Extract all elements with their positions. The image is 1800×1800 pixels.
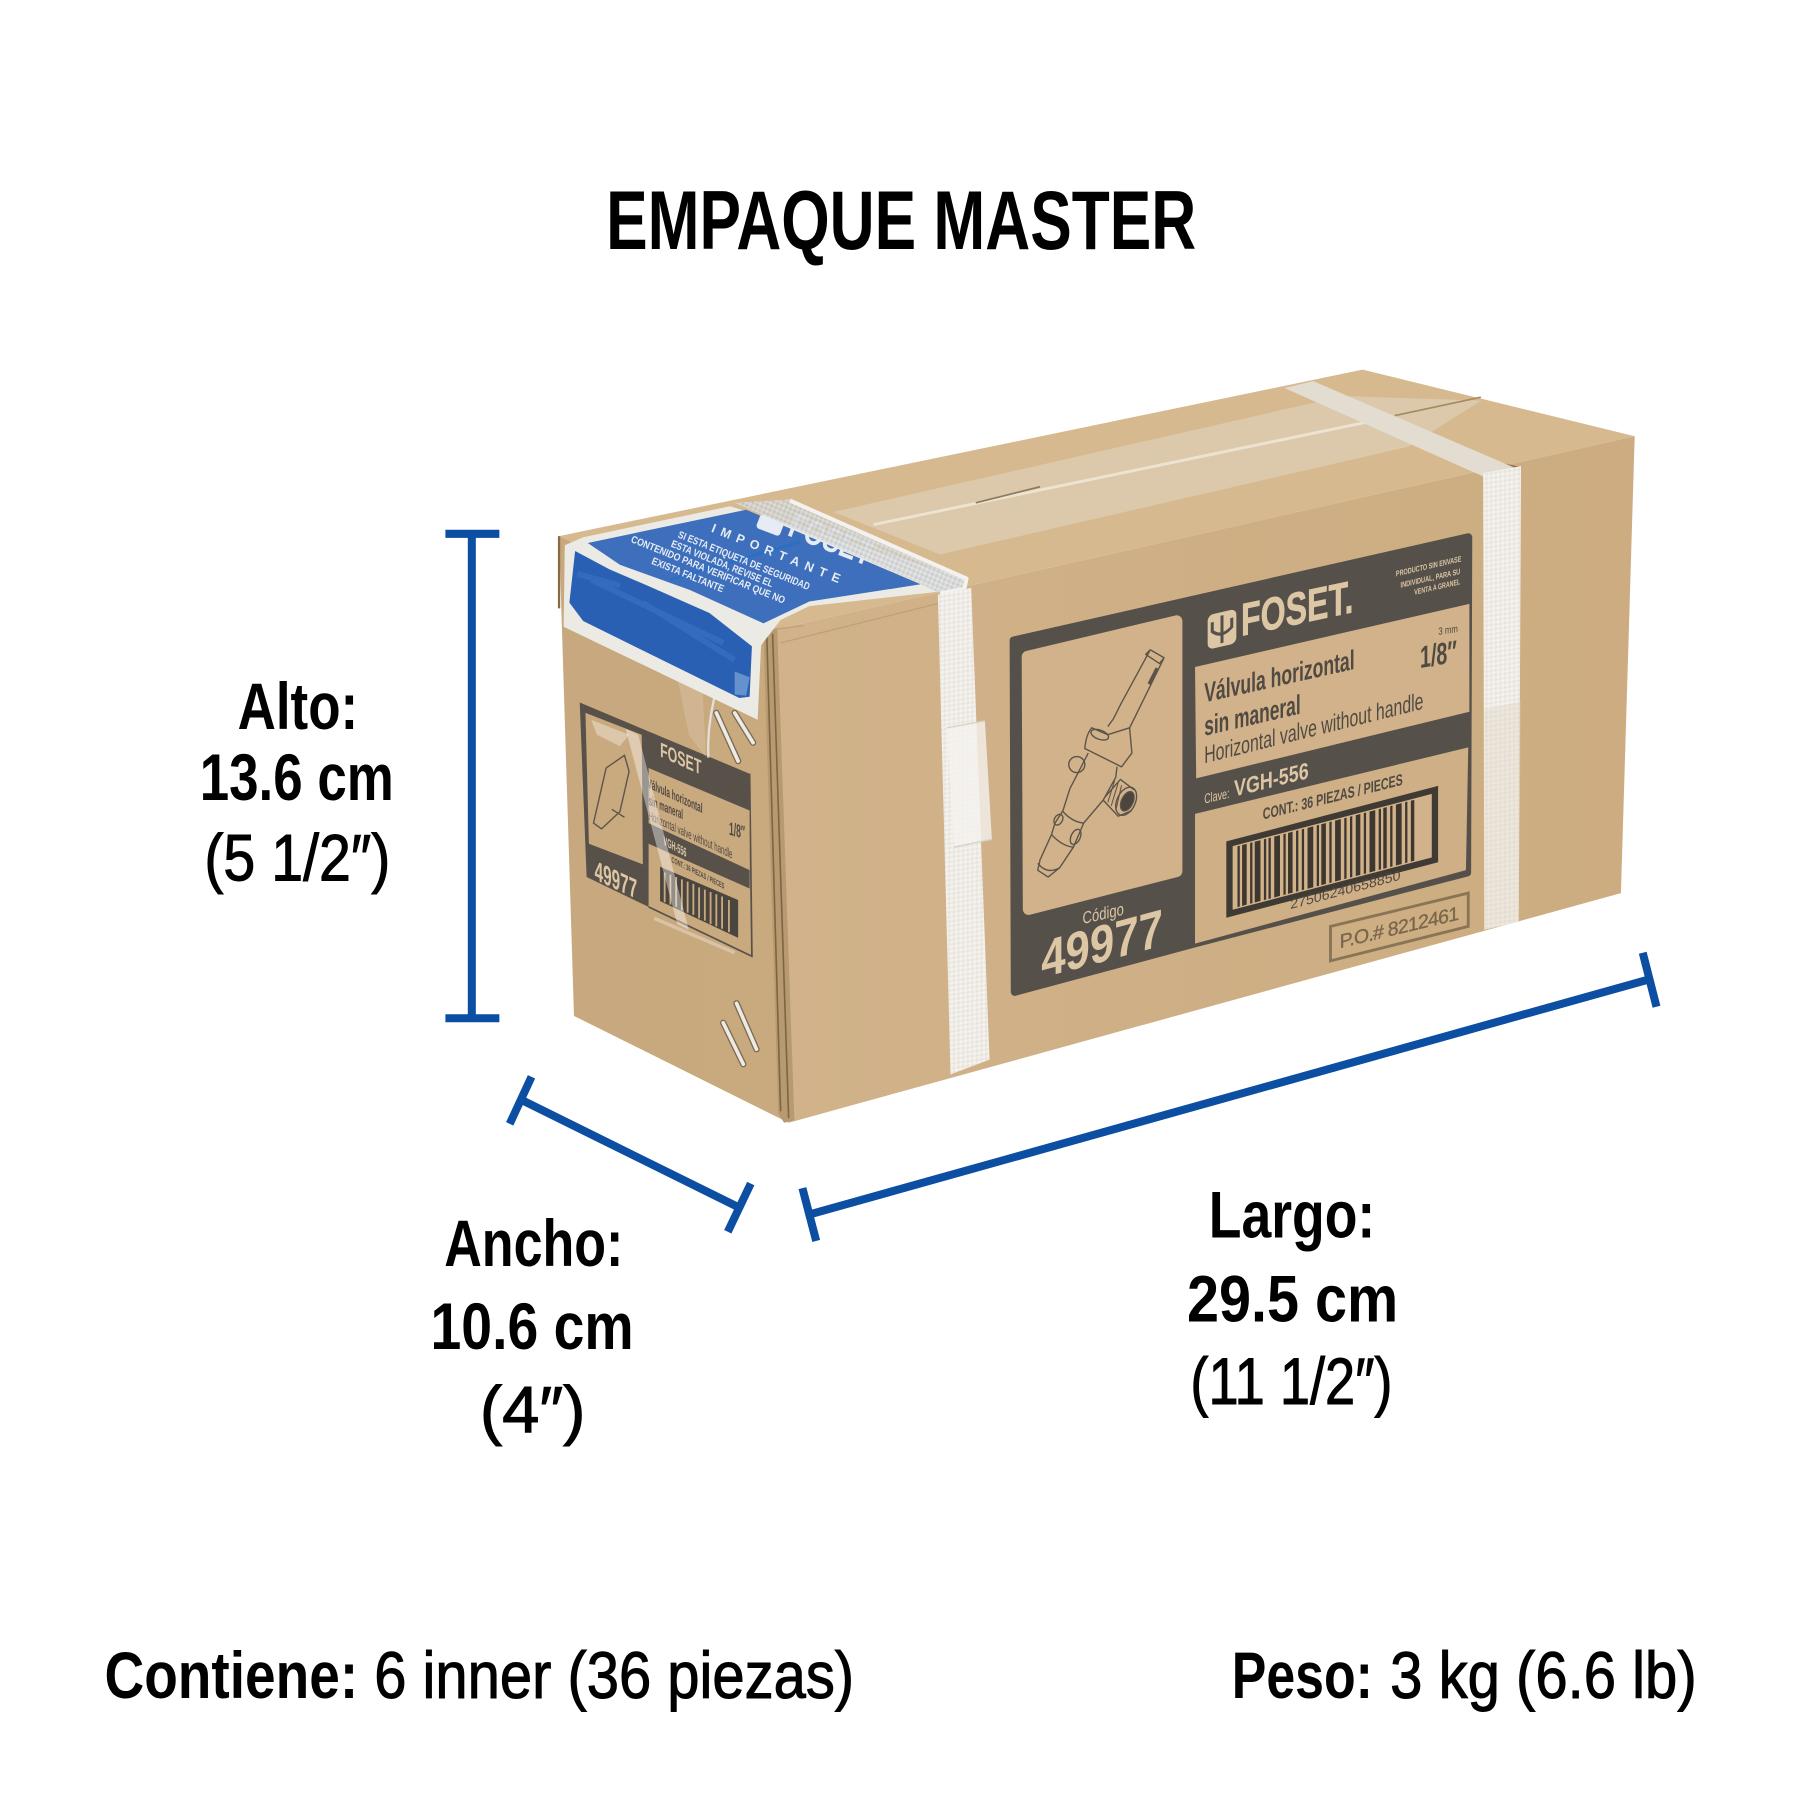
left label code: 49977 (595, 856, 637, 906)
clear tape over left face (591, 643, 735, 953)
left side printed label: 1/8″ (729, 818, 745, 843)
contents line (104, 1639, 854, 1712)
label: largo: (11 1/2″) (1190, 1345, 1392, 1418)
title: EMPAQUE MASTER (606, 173, 1196, 267)
size: 3 mm (1438, 624, 1458, 638)
label dark frame (1014, 537, 1468, 992)
sticker wording: SI ESTA ETIQUETA DE SEGURIDAD (676, 530, 812, 593)
barcode number: 27506240658850 (1290, 867, 1401, 912)
sticker paper (564, 506, 967, 720)
left label picture box (585, 713, 643, 864)
back strap (1483, 466, 1521, 930)
purchase order stamp: P.O.# 8212461 (1340, 903, 1459, 953)
left label valve drawing (593, 755, 629, 829)
brand name: FOSET. (1241, 571, 1353, 646)
sticker top face blue (588, 510, 921, 623)
english name: Horizontal valve without handle (1204, 688, 1423, 769)
lengthwise packing tape (833, 396, 1521, 554)
purchase order stamp (1330, 893, 1468, 961)
left side printed label: Horizontal valve without handle (649, 808, 732, 862)
label: ancho: (4″) (480, 1374, 585, 1447)
weight line (1232, 1639, 1697, 1712)
brand mark (1208, 609, 1236, 650)
code caption: Código (1083, 899, 1124, 928)
label: largo: Largo: (1209, 1178, 1375, 1251)
label: alto: 13.6 cm (200, 741, 394, 814)
sticker wording: ESTA VIOLADA, REVISE EL (669, 539, 775, 590)
weight line: Peso: (1232, 1639, 1373, 1712)
back strap top segment (1285, 381, 1519, 478)
product name: Válvula horizontal (1204, 644, 1355, 708)
contents: CONT.: 36 PIEZAS / PIECES (1263, 771, 1403, 824)
sticker wording: IMPORTANTE (709, 521, 842, 586)
corner crease (559, 536, 964, 1123)
box top face (559, 370, 1635, 630)
code number: 49977 (1041, 898, 1163, 990)
left side printed label: CONT.: 36 PIEZAS / PIECES (672, 855, 725, 891)
label picture box (1027, 621, 1177, 909)
sticker wording: CONTENIDO PARA VERIFICAR QUE NO (629, 534, 786, 607)
front printed label: 1/8″ (1420, 634, 1457, 675)
dimension: largo line (802, 953, 1657, 1241)
cardboard box (559, 370, 1635, 1123)
left side printed label: VGH-556 (664, 834, 687, 860)
left side printed label (580, 703, 752, 956)
bulk notice: PRODUCTO SIN ENVASE (1396, 554, 1462, 578)
label: ancho: 10.6 cm (430, 1290, 634, 1363)
label: largo (1187, 1178, 1398, 1418)
label: ancho (430, 1207, 634, 1447)
valve line drawing (1038, 650, 1164, 877)
barcode (1229, 790, 1435, 914)
left label info box (649, 768, 750, 870)
bulk notice: INDIVIDUAL, PARA SU (1401, 567, 1460, 590)
contents line: Contiene: (104, 1639, 358, 1712)
label: alto: Alto: (238, 670, 358, 743)
weight line: 3 kg (6.6 lb) (1390, 1639, 1697, 1712)
front strap top segment (735, 499, 967, 593)
front printed label: VGH-556 (1234, 757, 1309, 802)
front printed label: sin maneral (1204, 689, 1301, 742)
left label brand: FOSET (660, 737, 701, 780)
contents line: 6 inner (36 piezas) (374, 1639, 854, 1712)
sticker wording: FOSET (783, 507, 879, 574)
bulk notice: VENTA A GRANEL (1414, 577, 1460, 597)
label: ancho: Ancho: (444, 1207, 623, 1280)
bulk notice (1396, 554, 1462, 597)
label: largo: 29.5 cm (1187, 1262, 1398, 1335)
sticker left face blue (569, 551, 752, 698)
sticker wording (629, 507, 879, 607)
blue security sticker (564, 506, 967, 720)
label: alto (200, 670, 394, 894)
dimension: ancho line (510, 1077, 751, 1232)
label: alto: (5 1/2″) (204, 821, 390, 894)
left side printed label: sin maneral (649, 793, 683, 823)
front printed label (1014, 537, 1469, 992)
box front face (771, 436, 1635, 1123)
front strap (938, 588, 992, 1074)
left side printed label: Válvula horizontal (647, 776, 703, 817)
box left face (559, 536, 789, 1123)
left label barcode (660, 867, 738, 938)
sticker wording: EXISTA FALTANTE (650, 556, 725, 595)
clave: Clave: (1204, 785, 1229, 807)
label lower box (1195, 747, 1468, 944)
staples (716, 713, 757, 1064)
label info box (1195, 604, 1469, 778)
dimension: alto line (445, 534, 499, 1018)
